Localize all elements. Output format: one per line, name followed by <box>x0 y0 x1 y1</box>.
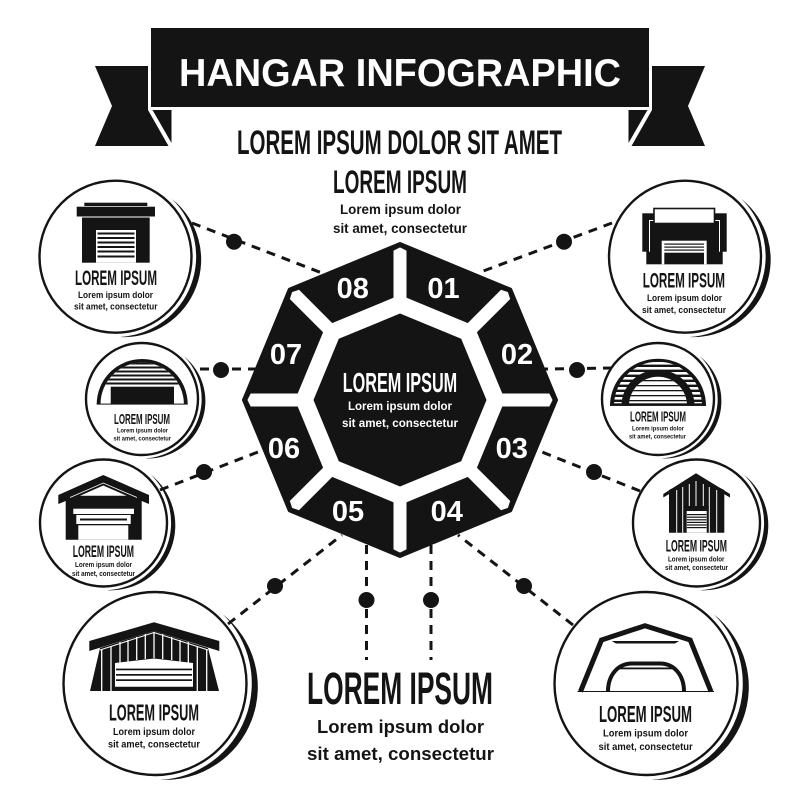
segment numbers: 06 <box>268 433 300 465</box>
ring <box>64 592 246 775</box>
ring <box>86 343 198 455</box>
ring <box>40 181 192 333</box>
connector bottom left <box>358 545 374 660</box>
outer octagon <box>244 244 556 556</box>
label <box>108 700 200 751</box>
ring <box>609 181 761 333</box>
panel: bottom left large hangar <box>64 592 258 780</box>
label <box>629 409 686 441</box>
segment numbers: 08 <box>337 273 369 305</box>
crescent <box>661 356 721 458</box>
label: sit amet, consectetur <box>629 434 686 441</box>
central text: LOREM IPSUM <box>343 367 457 398</box>
label: Lorem ipsum dolor <box>117 428 168 435</box>
bottom text block <box>307 663 494 764</box>
connector bottom right <box>423 545 439 660</box>
panel: lower left garage hangar <box>40 460 175 590</box>
label: sit amet, consectetur <box>642 305 726 315</box>
crescent <box>700 475 768 590</box>
label <box>665 538 728 572</box>
ring <box>633 460 760 586</box>
label: Lorem ipsum dolor <box>113 727 195 738</box>
banner left tail <box>95 66 168 146</box>
panel: top left hangar <box>40 181 201 337</box>
banner main band <box>151 28 649 107</box>
connector 07 <box>200 362 256 378</box>
bottom text block: LOREM IPSUM <box>307 663 493 714</box>
bottom text block: Lorem ipsum dolor <box>317 717 484 737</box>
label: LOREM IPSUM <box>114 411 170 428</box>
crescent <box>690 199 771 337</box>
label: LOREM IPSUM <box>75 267 157 290</box>
panel: top right hangar <box>609 181 771 337</box>
label <box>598 701 693 753</box>
segment numbers: 05 <box>332 496 364 528</box>
icon: winged hangar <box>642 208 727 264</box>
panel: lower right barn hangar <box>633 460 768 590</box>
banner left fold <box>152 110 172 143</box>
label: Lorem ipsum dolor <box>647 293 722 303</box>
crescent <box>160 614 258 780</box>
label: Lorem ipsum dolor <box>75 560 132 569</box>
central text: sit amet, consectetur <box>342 416 458 430</box>
top text block <box>333 164 468 236</box>
top text block: LOREM IPSUM <box>333 164 467 200</box>
crescent <box>107 475 175 590</box>
segment numbers: 01 <box>427 273 460 305</box>
central text: Lorem ipsum dolor <box>348 399 452 413</box>
icon: arched hangar <box>610 359 706 406</box>
connector 06 <box>160 452 258 490</box>
connector 05 <box>228 535 342 624</box>
title text: HANGAR INFOGRAPHIC <box>179 52 621 95</box>
top text block: sit amet, consectetur <box>333 221 468 236</box>
label: LOREM IPSUM <box>599 701 692 727</box>
connectors <box>160 223 640 660</box>
crescent <box>145 356 205 458</box>
connector 04 <box>458 535 573 625</box>
segment numbers: 02 <box>501 339 533 371</box>
white ring <box>295 295 505 505</box>
central text <box>342 367 458 430</box>
label: sit amet, consectetur <box>598 742 693 753</box>
crescent <box>120 199 201 337</box>
label: sit amet, consectetur <box>72 569 135 578</box>
ring <box>40 460 167 586</box>
label <box>74 267 158 312</box>
icon: barn hangar <box>663 473 730 533</box>
banner right fold <box>628 110 648 143</box>
label: Lorem ipsum dolor <box>632 426 684 433</box>
bottom text block: sit amet, consectetur <box>307 744 494 764</box>
segment numbers: 03 <box>496 433 528 465</box>
ring <box>602 343 714 455</box>
inner octagon <box>314 314 486 486</box>
icon: open tent hangar <box>578 626 714 692</box>
icon: roller door hangar <box>77 203 155 263</box>
central octagon <box>244 244 556 556</box>
label: sit amet, consectetur <box>665 563 728 572</box>
segment numbers <box>268 273 533 528</box>
segment numbers: 07 <box>270 339 302 371</box>
icon: large ribbed hangar <box>89 622 219 691</box>
label: Lorem ipsum dolor <box>78 290 153 300</box>
label: Lorem ipsum dolor <box>668 555 725 564</box>
label <box>642 270 726 315</box>
label: LOREM IPSUM <box>643 270 725 293</box>
subtitle: LOREM IPSUM DOLOR SIT AMET <box>237 124 562 162</box>
connector 02 <box>544 362 612 378</box>
label: Lorem ipsum dolor <box>603 729 688 740</box>
icon: dome hangar <box>96 358 188 405</box>
connector 03 <box>542 452 640 491</box>
label: LOREM IPSUM <box>666 538 727 556</box>
panel: middle left dome hangar <box>86 343 205 458</box>
connector 01 <box>478 223 612 273</box>
label <box>72 543 135 578</box>
segment numbers: 04 <box>431 496 463 528</box>
label: LOREM IPSUM <box>109 700 199 726</box>
ring <box>554 592 738 775</box>
label: LOREM IPSUM <box>630 409 686 426</box>
title banner <box>95 28 705 146</box>
panel: bottom right tent hangar <box>554 592 749 780</box>
spokes <box>248 248 552 552</box>
panel: middle right arched hangar <box>602 343 721 458</box>
top text block: Lorem ipsum dolor <box>340 202 462 217</box>
connector 08 <box>192 223 322 273</box>
label <box>114 411 171 443</box>
banner right tail <box>632 66 705 146</box>
label: LOREM IPSUM <box>73 543 134 561</box>
label: sit amet, consectetur <box>108 740 200 751</box>
label: sit amet, consectetur <box>74 302 158 312</box>
label: sit amet, consectetur <box>114 436 171 443</box>
icon: gabled garage <box>58 475 149 540</box>
crescent <box>651 614 749 780</box>
